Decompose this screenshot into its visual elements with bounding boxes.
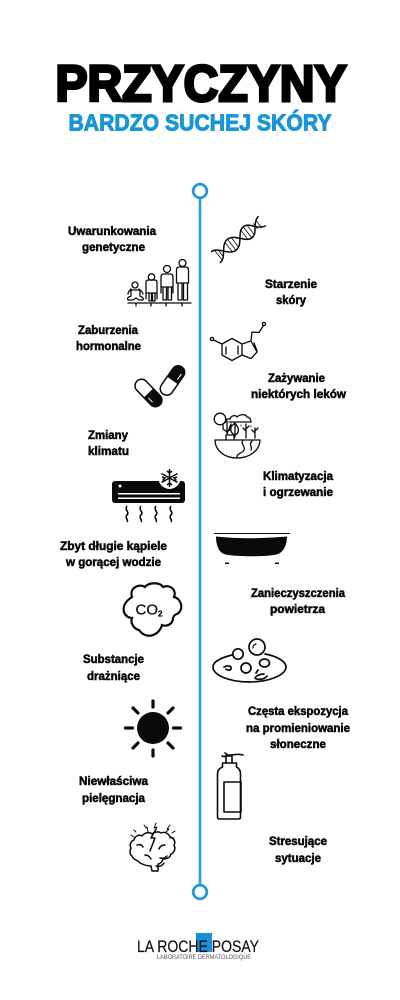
label: irritants: Substancje <box>83 652 144 666</box>
label: hormonal disorders <box>76 323 141 353</box>
label: air conditioning and heating: i ogrzewanie <box>263 485 333 499</box>
label: hormonal disorders: Zaburzenia <box>78 323 138 337</box>
timeline <box>193 184 207 899</box>
icon: air conditioner <box>112 467 185 522</box>
label: sun exposure <box>246 704 350 751</box>
icon: sun <box>126 701 180 756</box>
icon: climate globe <box>214 413 260 458</box>
label: long hot baths: Zbyt długie kąpiele <box>60 539 167 553</box>
label: skin ageing: Starzenie <box>265 277 317 291</box>
title: PRZYCZYNY <box>56 55 346 112</box>
label: improper care: pielęgnacja <box>82 791 145 805</box>
icon: molecule <box>210 322 266 360</box>
label: air pollution: powietrza <box>270 602 325 616</box>
label: long hot baths <box>60 539 167 569</box>
label: improper care <box>79 774 148 805</box>
label: air conditioning and heating: Klimatyzacja <box>263 469 333 483</box>
icon: growing family <box>128 260 191 306</box>
icon: CO2 cloud: CO <box>136 602 158 618</box>
label: genetic conditions <box>68 224 156 254</box>
subtitle: BARDZO SUCHEJ SKÓRY <box>68 108 332 136</box>
label: irritants: drażniące <box>87 669 140 683</box>
label: hormonal disorders: hormonalne <box>76 339 141 353</box>
icon: dish with particles <box>213 639 286 682</box>
icon: stressed brain <box>130 823 175 871</box>
label: climate change <box>88 428 129 458</box>
label: air pollution <box>251 586 345 616</box>
label: skin ageing <box>265 277 317 307</box>
label: taking medicines: Zażywanie <box>268 371 325 385</box>
label: sun exposure: słoneczne <box>270 737 326 751</box>
label: climate change: Zmiany <box>88 428 128 442</box>
label: genetic conditions: Uwarunkowania <box>68 224 156 238</box>
label: skin ageing: skóry <box>276 293 306 307</box>
label: long hot baths: w gorącej wodzie <box>65 555 161 569</box>
brand logo: LABORATOIRE DERMATOLOGIQUE <box>157 954 252 961</box>
label: improper care: Niewłaściwa <box>79 774 148 788</box>
label: sun exposure: na promieniowanie <box>246 721 350 735</box>
label: sun exposure: Częsta ekspozycja <box>248 704 348 718</box>
icon: bathtub <box>214 533 290 564</box>
brand logo: LA ROCHE POSAY <box>137 937 259 956</box>
icon: pump bottle <box>218 753 243 819</box>
label: taking medicines: niektórych leków <box>251 387 347 401</box>
label: stressful situations: sytuacje <box>275 851 321 865</box>
label: stressful situations: Stresujące <box>269 834 327 848</box>
label: irritants <box>83 652 144 683</box>
icon: DNA helix <box>212 216 266 263</box>
icon: CO2 cloud: 2 <box>158 610 163 618</box>
icon: CO2 cloud <box>124 583 181 636</box>
label: taking medicines <box>251 371 347 401</box>
label: stressful situations <box>269 834 327 865</box>
brand logo <box>137 933 259 961</box>
label: air pollution: Zanieczyszczenia <box>251 586 345 600</box>
label: air conditioning and heating <box>263 469 333 499</box>
label: genetic conditions: genetyczne <box>82 240 145 254</box>
label: climate change: klimatu <box>88 444 129 458</box>
icon: capsules <box>132 363 187 409</box>
